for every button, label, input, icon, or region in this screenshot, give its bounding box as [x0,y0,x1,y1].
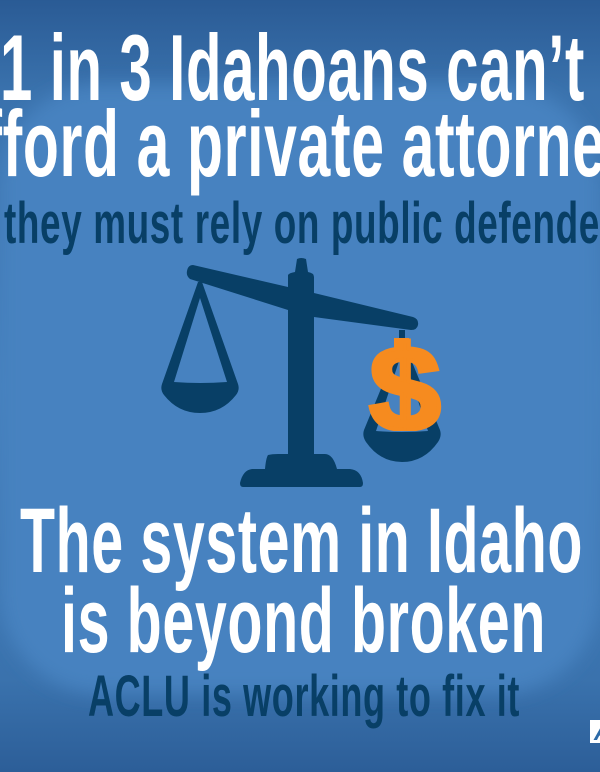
scale beam [187,258,418,455]
right pan [363,330,441,462]
left pan [161,282,239,413]
scale base [240,454,363,487]
icon: orange dollar sign [368,338,442,431]
icon: tilted balance scale [161,258,441,487]
icon: orange dollar sign: $ [369,320,441,457]
logo: ACLU badge, clipped [590,719,600,746]
